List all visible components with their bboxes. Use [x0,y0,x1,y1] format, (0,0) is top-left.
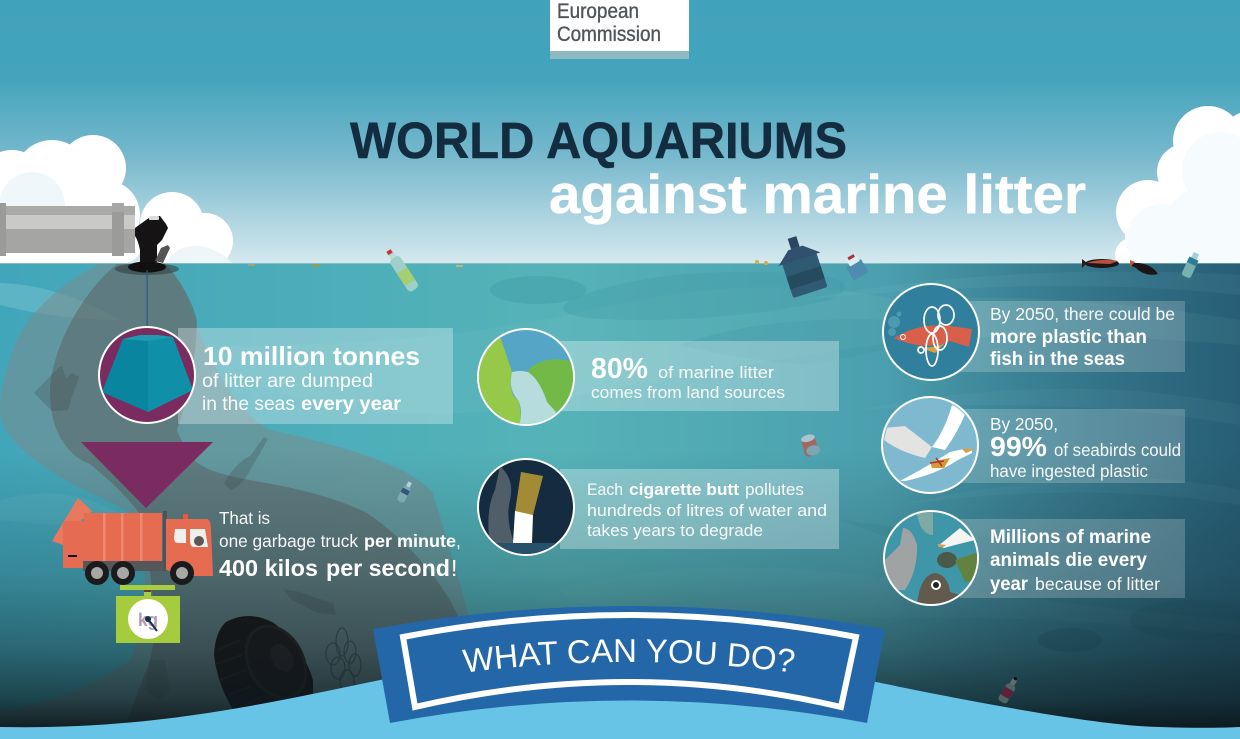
icon: dead fish [1130,260,1158,275]
panel: plastic vs fish [882,283,1185,381]
panel: 80% land sources: 80% [591,353,648,385]
icon: bottle green [384,247,419,293]
panel: cigarette butt [475,458,839,557]
circle: seabird [881,396,979,494]
panel: 10 million tonnes [98,326,453,424]
logo: European Commission: Commission [557,23,661,46]
panel: seabirds: 99% [990,431,1047,462]
inner plume [50,264,485,739]
circle: fish in plastic rings [882,283,980,381]
icon: water jug [772,231,831,299]
text panel [560,469,839,549]
panel: plastic vs fish: fish in the seas [990,349,1125,370]
title: WORLD AQUARIUMS [350,112,847,169]
circle: dead marine animals [883,510,979,610]
panel: seabirds: have ingested plastic [990,461,1148,481]
pipe [0,203,135,256]
jug [145,660,170,700]
panel: cigarette butt: cigarette butt [629,480,739,499]
banner: what can you do: WHAT CAN YOU DO? [462,639,794,672]
submerged litter silhouettes [34,366,336,700]
panel: marine animals [883,510,1185,610]
panel: seabirds: By 2050, [990,414,1058,434]
panel: cigarette butt: takes years to degrade [587,521,763,540]
arrow: purple triangle [81,442,213,508]
text panel [960,409,1185,483]
panel: seabirds [881,396,1185,494]
icon: black sludge from pipe [115,216,179,275]
heading: 10 million tonnes [203,341,420,371]
panel: plastic vs fish: more plastic than [990,327,1147,348]
panel: 10 million tonnes: of litter are dumped [202,371,373,392]
text: garbage truck per minute: 400 kilos [219,555,318,581]
panel: 10 million tonnes: every year [301,394,402,415]
panel: cigarette butt: pollutes [745,480,804,499]
cloud right [1115,106,1240,276]
text panel [960,301,1185,372]
plume line from pipe to circle [146,270,148,330]
ground: light blue water foreground [0,655,1240,739]
panel: cigarette butt: Each [587,480,623,499]
panel: plastic vs fish: By 2050, there could be [990,304,1175,324]
panel: marine animals: Millions of marine [990,527,1151,548]
dark depth gradient over the sea [0,450,1240,739]
text: garbage truck per minute: ! [451,555,457,581]
panel: 80% land sources: comes from land sources [591,383,785,402]
text panel [560,341,839,411]
panel: 80% land sources [470,328,839,430]
panel: marine animals: because of litter [1035,574,1160,594]
panel: cigarette butt: hundreds of litres of water and [587,501,827,520]
cloud left [0,135,233,269]
glass bottle [224,437,268,490]
icon: bottle right [1181,251,1201,279]
floating litter on surface [248,231,1201,705]
icon: tyre [214,616,318,720]
outer plume [0,264,490,739]
icon: kitchen scale: kg [138,610,158,630]
panel: marine animals: animals die every [990,550,1147,571]
banner: what can you do [373,606,885,723]
sea background [0,263,1240,739]
circle: river landscape [477,328,575,426]
title: against marine litter [549,163,1086,225]
text panel [178,328,453,424]
text: garbage truck per minute: one garbage truck [219,531,358,551]
text: garbage truck per minute: , [456,531,461,551]
logo: European Commission: European [557,0,639,23]
panel: marine animals: year [990,574,1029,595]
icon: bottle bottom right [997,675,1021,705]
panel: 80% land sources: of marine litter [658,363,774,382]
waves [0,272,1240,652]
icon: floating fish [1082,259,1119,268]
panel: seabirds: of seabirds could [1054,440,1181,460]
icon: bottle mid [396,480,414,504]
text: garbage truck per minute: That is [219,508,270,528]
sky background [0,0,1240,264]
text: garbage truck per minute: per second [326,555,450,581]
circle: cigarette butt [475,458,575,557]
plume: pollution spreading from the pipe [0,264,490,739]
panel: 10 million tonnes: in the seas [202,394,295,415]
icon: can of rings [326,628,361,694]
title [350,112,1086,225]
icon: blue packet [842,252,868,281]
icon: kitchen scale [116,585,180,643]
circle: cube of litter [98,326,196,424]
small surface debris [248,260,768,267]
text panel [960,519,1185,598]
icon: garbage truck [52,498,213,585]
dark bottle [283,589,336,615]
plastic bag [34,366,79,411]
text: garbage truck per minute [219,508,461,581]
logo: European Commission [550,0,689,59]
icon: can [800,433,821,457]
text: garbage truck per minute: per minute [364,531,456,551]
